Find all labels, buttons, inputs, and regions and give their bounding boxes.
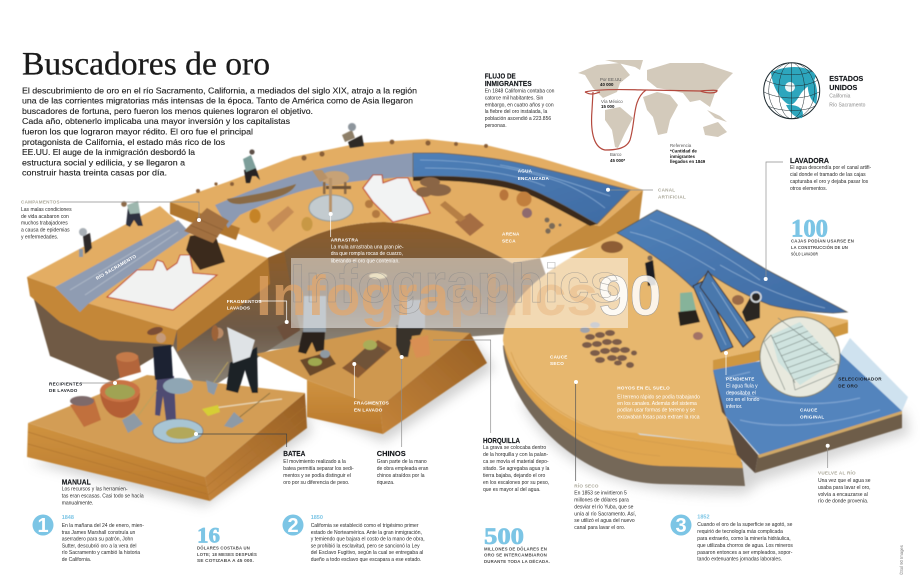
intro text: protagonista de California, el estado más rico de los bbox=[22, 138, 225, 147]
intro text: una de las corrientes migratorias más intensas de la época. Tanto de América como de Asia llegaron bbox=[22, 97, 413, 106]
callout: campamentos: a causa de epidemias bbox=[21, 228, 70, 234]
callout: río seco: canal para lavar el oro. bbox=[574, 525, 625, 531]
timeline 2: 1850: del Esclavo Fugitivo, según la cual se entregaba al bbox=[311, 550, 423, 556]
original river bed pool bbox=[713, 353, 902, 455]
timeline 3: 1852: 1852 bbox=[697, 514, 710, 520]
tools on ground bbox=[202, 393, 282, 428]
callout: batea: mentos y se podía distinguir el bbox=[283, 473, 351, 479]
callout: pendiente: inferior. bbox=[726, 404, 742, 410]
stat: 16 bbox=[197, 523, 257, 563]
rock pile bbox=[580, 322, 637, 368]
callout: campamentos: muchos trabajadores bbox=[21, 220, 68, 226]
callout: río seco: se utilizó el agua del nuevo bbox=[574, 518, 635, 524]
callout: horquilla bbox=[433, 340, 550, 493]
log pile bbox=[416, 177, 451, 197]
arc raised corner face bbox=[170, 202, 240, 240]
callout: lavadora bbox=[764, 156, 871, 281]
camp hut bbox=[184, 208, 229, 270]
timeline 3: 1852 bbox=[670, 514, 793, 562]
callout: río seco: CAUCE bbox=[550, 354, 568, 360]
locator globe bbox=[764, 63, 820, 119]
text: immigrant flow: embargo, en cuatro años y con bbox=[485, 102, 554, 108]
timeline 3: 1852: para extraerlo, como la minería hidráulica, bbox=[697, 536, 791, 542]
callout: campamentos: CAMPAMENTOS bbox=[21, 200, 60, 204]
timeline 2: 1850 bbox=[282, 514, 425, 563]
timeline 2: 1850: California se estableció como el trigésimo primer bbox=[311, 523, 419, 529]
callout: hoyos en el suelo: excavaban fosas para extraer la roca bbox=[617, 414, 700, 420]
sack bbox=[163, 378, 193, 394]
white plot outlined in red bbox=[363, 175, 430, 222]
stat: 500 bbox=[484, 524, 550, 564]
callout: arrastra: ARRASTRA bbox=[331, 238, 359, 243]
label: arena: SECA bbox=[502, 238, 516, 243]
callout: horquilla: HORQUILLA bbox=[483, 436, 520, 445]
canal water channel bbox=[413, 153, 630, 224]
stat: 500: MILLONES DE DÓLARES EN bbox=[484, 544, 547, 552]
callout: hoyos en el suelo: en los canales. Además del sistema bbox=[617, 401, 697, 407]
pale overflow water bbox=[840, 338, 908, 411]
intro text bbox=[22, 86, 417, 178]
left face bbox=[307, 380, 383, 434]
callout: vuelve al río: Una vez que el agua se bbox=[818, 478, 871, 484]
callout: campamentos: de vida acabaron con bbox=[21, 214, 69, 220]
right face bbox=[380, 333, 487, 434]
callout: seleccionador de oro: DE ORO bbox=[838, 384, 858, 389]
callout: campamentos: y enfermedades. bbox=[21, 234, 58, 240]
stat: 500: DURANTE TODA LA DÉCADA. bbox=[484, 557, 550, 564]
timeline 2: 1850: 2 bbox=[287, 515, 299, 537]
timeline 1: 1848: río Sacramento y cambió la historia bbox=[62, 550, 140, 556]
callout: lavadora: El agua descendía por el canal artifi- bbox=[790, 165, 871, 171]
timeline 1: 1848: 1 bbox=[37, 515, 49, 537]
locator text: California bbox=[829, 94, 851, 100]
world map with migration routes: llegados en 1849 bbox=[670, 159, 706, 164]
callout: río seco: unía al río Sacramento. Así, bbox=[574, 512, 636, 518]
callout: vuelve al río: usaba para lavar el oro, bbox=[818, 485, 871, 491]
world map with migration routes: *Cantidad de bbox=[670, 148, 697, 154]
callout: hoyos en el suelo: HOYOS EN EL SUELO bbox=[617, 386, 670, 391]
flume water streaks bbox=[630, 220, 825, 345]
callout: recipientes de lavado: RECIPIENTES bbox=[49, 381, 82, 386]
timeline 2: 1850: estado de Norteamérica. Ante la gran inmigración, bbox=[311, 530, 422, 536]
world map with migration routes: inmigrantes bbox=[670, 154, 695, 159]
barrels bbox=[250, 209, 260, 223]
callout: vuelve al río: VUELVE AL RÍO bbox=[818, 468, 856, 475]
callout: batea: BATEA bbox=[283, 449, 306, 458]
stone river section bbox=[215, 153, 413, 228]
left seated man bbox=[298, 296, 336, 376]
intro text: El descubrimiento de oro en el río Sacramento, California, a mediados del siglo XIX, atrajo a la región bbox=[22, 86, 417, 95]
soft shadows under the blocks bbox=[30, 340, 910, 506]
text: immigrant flow: INMIGRANTES bbox=[485, 79, 532, 88]
callout: campamentos: Las malas condiciones bbox=[21, 207, 72, 213]
disc ridge bands bbox=[511, 352, 738, 456]
callout: batea: oro por su diferencia de peso. bbox=[283, 480, 349, 486]
arc surface props bbox=[227, 123, 561, 236]
front manual block bbox=[27, 325, 307, 501]
river streaks bbox=[70, 230, 178, 295]
timeline 2: 1850: y temiendo que bajara el costo de la mano de obra, bbox=[311, 536, 425, 542]
callout: hoyos en el suelo bbox=[617, 386, 700, 420]
intro text: EE.UU. El auge de la inmigración desbordó la bbox=[22, 148, 195, 157]
callout: río seco: desviar el río Yuba, que se bbox=[574, 504, 634, 510]
inset detail: stepped riffle box bbox=[760, 317, 840, 397]
label: Río Sacramento: RÍO SACRAMENTO bbox=[94, 252, 137, 281]
callout: río seco bbox=[550, 354, 636, 531]
world map with migration routes: Vía México bbox=[601, 99, 623, 104]
small buckets bbox=[365, 200, 380, 218]
callout: fragmentos en lavado: FRAGMENTOS bbox=[354, 401, 389, 406]
callout: canal artificial: ARTIFICIAL bbox=[658, 194, 686, 199]
callout: manual: MANUAL bbox=[62, 477, 91, 486]
stat: 100: CAJAS PODÍAN USARSE EN bbox=[791, 237, 854, 244]
world map with migration routes bbox=[578, 60, 733, 164]
callout: campamentos bbox=[21, 200, 201, 240]
locator text: ESTADOS bbox=[829, 74, 863, 83]
callout: batea: batea permitía separar los sedi- bbox=[283, 466, 354, 472]
rock layer bbox=[503, 345, 745, 486]
left orange band bbox=[27, 277, 177, 345]
text: immigrant flow: población ascendió a 223.856 bbox=[485, 116, 551, 122]
callout: pendiente: depositaba el bbox=[726, 390, 756, 396]
boat bbox=[227, 184, 296, 204]
sluice cart bbox=[455, 213, 484, 236]
callout: chinos: riqueza. bbox=[377, 480, 394, 486]
intro text: buscadores de fortuna, pero fueron los menos quienes lograron el objetivo. bbox=[22, 107, 313, 116]
bending miner with shovel bbox=[206, 325, 258, 395]
stat: 500: ORO SE INTERCAMBIARON bbox=[484, 552, 547, 558]
callout: vuelve al río: volvía a encauzarse al bbox=[818, 492, 868, 498]
callout: fragmentos lavados: FRAGMENTOS bbox=[227, 299, 262, 304]
arrastra mill bbox=[309, 195, 353, 221]
label: cauce original: CAUCE bbox=[800, 408, 818, 413]
callout: hoyos en el suelo: podían usar formas de terreno y se bbox=[617, 408, 695, 414]
text: immigrant flow bbox=[485, 72, 555, 129]
right face bbox=[173, 252, 300, 395]
callout: recipientes de lavado: DE LAVADO bbox=[49, 388, 78, 393]
Sacramento river bbox=[55, 220, 190, 312]
flume branch two bbox=[700, 271, 755, 347]
arc rim stones bbox=[196, 140, 488, 193]
timeline 3: 1852: que utilizaba chorros de agua. Los mineros bbox=[697, 543, 793, 549]
callout: lavadora: capturaba el oro y dejaba pasar los bbox=[790, 179, 869, 185]
callout: río seco: En 1853 se invirtieron 5 bbox=[574, 490, 627, 496]
canal water streaks bbox=[420, 160, 610, 208]
callout: lavadora: otros elementos. bbox=[790, 186, 827, 192]
locator text: Río Sacramento bbox=[829, 102, 866, 108]
callout: río seco: SECO bbox=[550, 361, 564, 366]
right face bbox=[205, 393, 307, 501]
stat: 100: 100 bbox=[791, 216, 828, 243]
callout: recipientes de lavado bbox=[49, 381, 117, 393]
timeline 3: 1852: requirió de tecnología más complicada bbox=[697, 529, 783, 535]
callout: horquilla: tierra bajaba, dejando el oro bbox=[483, 473, 545, 479]
world map with migration routes: 45 000* bbox=[610, 158, 625, 163]
timeline 3: 1852: Cuando el oro de la superficie se agotó, se bbox=[697, 522, 793, 528]
callout: arrastra: liberando el oro que contenían. bbox=[331, 258, 400, 264]
callout: fragmentos en lavado bbox=[352, 362, 389, 412]
callout: agua encauzada: ENCAUZADA bbox=[518, 176, 549, 181]
callout: vuelve al río bbox=[818, 444, 871, 504]
callout: vuelve al río: río de donde provenía. bbox=[818, 498, 868, 504]
tray near dot bbox=[277, 320, 300, 340]
timeline 1: 1848: 1848 bbox=[62, 515, 74, 521]
horse bbox=[312, 170, 351, 194]
text: immigrant flow: la fiebre del oro instalada, la bbox=[485, 109, 547, 115]
intro text: Cada año, obtenerlo implicaba una mayor inversión y los capitalistas bbox=[22, 117, 290, 126]
locator text bbox=[829, 74, 866, 108]
table bbox=[267, 206, 294, 232]
watermark word: Infographics90 bbox=[256, 264, 661, 328]
block strata bbox=[28, 406, 306, 495]
locator text: UNIDOS bbox=[829, 83, 857, 92]
text: immigrant flow: personas. bbox=[485, 123, 507, 129]
label: cauce original: ORIGINAL bbox=[800, 414, 824, 419]
miners on the far bank bbox=[79, 201, 143, 257]
canal trestle shadow bbox=[413, 176, 597, 226]
callout: lavadora: cial donde el tramado de las cajas bbox=[790, 172, 866, 178]
top face bbox=[28, 375, 305, 477]
central Chinese workers block bbox=[255, 273, 487, 434]
river block side face bbox=[713, 370, 758, 473]
timeline 1: 1848: tras James Marshall construía un bbox=[62, 530, 136, 536]
callout: horquilla: que es mayor al del agua. bbox=[483, 487, 541, 493]
watermark word: Infographics bbox=[290, 252, 620, 314]
arch inner wall bbox=[232, 222, 565, 352]
callout: pendiente: PENDIENTE bbox=[726, 377, 755, 382]
stat: 100: SÓLO LAVADOR bbox=[791, 250, 818, 256]
text: immigrant flow: En 1848 California contaba con bbox=[485, 88, 555, 94]
text: immigrant flow: catorce mil habitantes. Sin bbox=[485, 96, 544, 102]
callout: arrastra: dra que rompía rocas de cuarzo, bbox=[331, 251, 403, 257]
sand side layer bbox=[503, 340, 743, 468]
label: arena: ARENA bbox=[502, 231, 520, 236]
callout: manual bbox=[62, 477, 144, 506]
callout: horquilla: sitado. Se agregaba agua y la bbox=[483, 466, 550, 472]
stat: 16: LOTE; 18 MESES DESPUÉS bbox=[197, 550, 257, 557]
timeline 2: 1850: se prohibió la esclavitud, pero se sancionó la Ley bbox=[311, 544, 420, 550]
callout: río seco: RÍO SECO bbox=[574, 482, 599, 489]
wash tubs bbox=[70, 352, 141, 427]
callout: río seco: millones de dólares para bbox=[574, 498, 629, 504]
callout: horquilla: La grava se colocaba dentro bbox=[483, 445, 546, 451]
callout: pendiente: El agua fluía y bbox=[726, 384, 758, 390]
callout: fragmentos lavados: LAVADOS bbox=[227, 306, 250, 311]
river block sand rim bbox=[758, 411, 902, 458]
callout: pendiente: oro en el fondo bbox=[726, 397, 760, 403]
stat: 16: 16 bbox=[197, 523, 220, 548]
callout: chinos: de obra empleada eran bbox=[377, 466, 429, 472]
right seated man bbox=[369, 273, 430, 358]
callout: chinos bbox=[377, 355, 429, 486]
left layered face bbox=[27, 277, 177, 382]
callout: lavadora: LAVADORA bbox=[790, 156, 829, 165]
flume branch one bbox=[693, 281, 733, 352]
stat: 16: SE COTIZABA A 45 000. bbox=[197, 558, 254, 563]
callout: chinos: Gran parte de la mano bbox=[377, 459, 427, 465]
timeline 1: 1848: En la mañana del 24 de enero, mien- bbox=[62, 523, 144, 529]
callout: pendiente bbox=[724, 351, 760, 410]
intro text: estructura social y edilicia, y se llegaron a bbox=[22, 158, 185, 167]
title: Buscadores de oro bbox=[22, 46, 270, 82]
world map with migration routes: 15 000 bbox=[601, 104, 615, 109]
callout: chinos: chinos atraídos por la bbox=[377, 473, 425, 479]
world map with migration routes: 40 000 bbox=[600, 82, 614, 87]
callout: batea bbox=[194, 432, 354, 486]
timeline 2: 1850: 1850 bbox=[311, 515, 323, 521]
credit: ©Sol 90 Images bbox=[899, 545, 904, 575]
sand top surface bbox=[503, 233, 848, 446]
arc sand surface bbox=[170, 139, 643, 263]
river block front face bbox=[755, 411, 902, 473]
dry riverbed sector disc bbox=[503, 210, 908, 486]
timeline 1: 1848: de California. bbox=[62, 557, 91, 563]
left river block bbox=[27, 201, 300, 395]
rim miners bbox=[243, 123, 364, 183]
callout: arrastra: La mula arrastraba una gran pie- bbox=[331, 244, 404, 250]
callout: seleccionador de oro: SELECCIONADOR bbox=[838, 377, 882, 382]
stat: 100: LA CONSTRUCCIÓN DE UN bbox=[791, 243, 848, 250]
stat: 16: DÓLARES COSTABA UN bbox=[197, 544, 250, 550]
stat: 100 bbox=[791, 216, 854, 256]
timeline 1: 1848: aserradero para su patrón, John bbox=[62, 536, 133, 542]
standing miner with shovel bbox=[122, 326, 176, 433]
stat: 500: 500 bbox=[484, 524, 524, 549]
wide flume channel bbox=[617, 210, 847, 313]
callout: chinos: CHINOS bbox=[377, 449, 406, 458]
callout: seleccionador de oro bbox=[838, 377, 882, 389]
callout: canal artificial bbox=[606, 188, 686, 199]
callout: manual: Los recursos y las herramien- bbox=[62, 487, 128, 493]
timeline 3: 1852: pasaron entonces a ser empleados, sopor- bbox=[697, 550, 793, 556]
timeline 1: 1848: Sutter, descubrió oro a la vera del bbox=[62, 544, 136, 550]
far sand bank bbox=[27, 206, 178, 287]
white plot outlined in red bbox=[107, 255, 217, 310]
callout: canal artificial: CANAL bbox=[658, 188, 675, 192]
upper arc terrain with canal bbox=[170, 139, 643, 352]
watermark band bbox=[291, 258, 628, 328]
batea gold pan bbox=[153, 419, 203, 443]
callout: horquilla: ca se movía el material depo- bbox=[483, 459, 549, 465]
callout: horquilla: en los escalones por su peso, bbox=[483, 480, 549, 486]
callout: fragmentos lavados bbox=[227, 299, 289, 324]
left face bbox=[27, 423, 210, 501]
callout: agua encauzada: AGUA bbox=[518, 169, 533, 174]
arc end face bbox=[540, 190, 643, 258]
callout: horquilla: de la horquilla y con la palan- bbox=[483, 452, 548, 458]
world map with migration routes: Barco bbox=[610, 152, 622, 157]
intro text: construir hasta treinta casas por día. bbox=[22, 169, 167, 178]
timeline 2: 1850: dueño a todo esclavo que escapara a ese estado. bbox=[311, 557, 421, 563]
stream sand ridge bbox=[713, 322, 848, 371]
sluice box on planks bbox=[342, 340, 392, 378]
timeline 3: 1852: 3 bbox=[675, 515, 687, 537]
timeline 3: 1852: tando extenuantes jornadas laborales. bbox=[697, 556, 782, 562]
callout: fragmentos en lavado: EN LAVADO bbox=[354, 407, 383, 412]
callout: agua encauzada bbox=[518, 169, 549, 181]
text: immigrant flow: FLUJO DE bbox=[485, 72, 516, 80]
right orange band bbox=[177, 258, 270, 352]
near sand bank bbox=[87, 233, 268, 330]
intro text: fueron los que lograron mayor rédito. El oro fue el principal bbox=[22, 128, 253, 136]
label: cauce original bbox=[800, 408, 824, 419]
world map with migration routes: Referencia bbox=[670, 143, 692, 148]
callout: manual: manualmente. bbox=[62, 500, 93, 506]
miners at the flume bbox=[601, 241, 761, 340]
label: arena bbox=[502, 231, 520, 243]
callout: manual: tas eran escasas. Casi todo se hacía bbox=[62, 494, 144, 500]
pool highlights bbox=[725, 372, 880, 425]
top face bbox=[255, 327, 470, 407]
callout: arrastra bbox=[329, 212, 404, 264]
callout: hoyos en el suelo: El terreno rápido se podía trabajando bbox=[617, 394, 700, 400]
timeline 1: 1848 bbox=[32, 514, 144, 563]
callout: batea: El movimiento realizado a la bbox=[283, 459, 346, 465]
world map with migration routes: Por EE.UU. bbox=[600, 77, 623, 82]
